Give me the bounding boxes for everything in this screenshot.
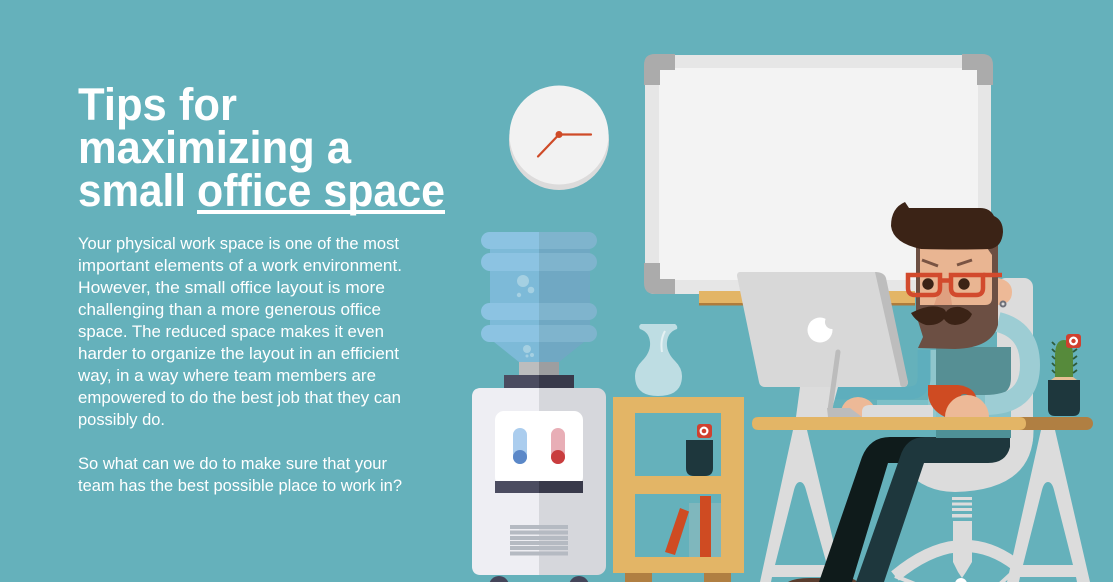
moustache [911, 306, 972, 325]
man's shoes [788, 578, 857, 582]
glass vase [635, 324, 682, 396]
desk top [752, 417, 1093, 430]
hair [891, 202, 1003, 250]
intro text block [77, 234, 402, 429]
potted cactus [1048, 334, 1081, 416]
books [665, 496, 721, 557]
intro text block: empowered to do the best job that they can [78, 388, 401, 407]
office chair [895, 278, 1034, 582]
man's legs [819, 437, 1010, 582]
man's head [891, 202, 1012, 349]
title: Tips for [78, 79, 237, 130]
closing question text: So what can we do to make sure that your [78, 454, 387, 473]
man's torso and arms [835, 322, 1030, 438]
small pot with flower [686, 424, 713, 476]
intro text block: important elements of a work environment. [78, 256, 402, 275]
intro text block: space. The reduced space makes it even [78, 322, 384, 341]
water cooler base [472, 375, 606, 582]
title [78, 79, 445, 216]
closing question text: team has the best possible place to work in? [78, 476, 402, 495]
title: small [78, 165, 186, 216]
intro text block: way, in a way where team members are [77, 366, 376, 385]
title: office space [197, 165, 445, 216]
intro text block: However, the small office layout is more [78, 278, 385, 297]
wooden shelf [613, 397, 744, 582]
closing question text [78, 454, 402, 495]
intro text block: challenging than a more generous office [78, 300, 381, 319]
intro text block: harder to organize the layout in an efficient [78, 344, 399, 363]
red glasses [908, 275, 1002, 295]
whiteboard [644, 54, 993, 306]
computer monitor [737, 272, 908, 417]
intro text block: possibly do. [78, 410, 165, 429]
title: maximizing a [78, 122, 352, 173]
water cooler bottle [481, 232, 597, 375]
icon: apple-style logo [808, 315, 839, 342]
desk trestle legs [760, 430, 1090, 582]
keyboard, hands and red mug [827, 352, 989, 417]
intro text block: Your physical work space is one of the most [78, 234, 399, 253]
icon: wall clock [509, 86, 609, 190]
